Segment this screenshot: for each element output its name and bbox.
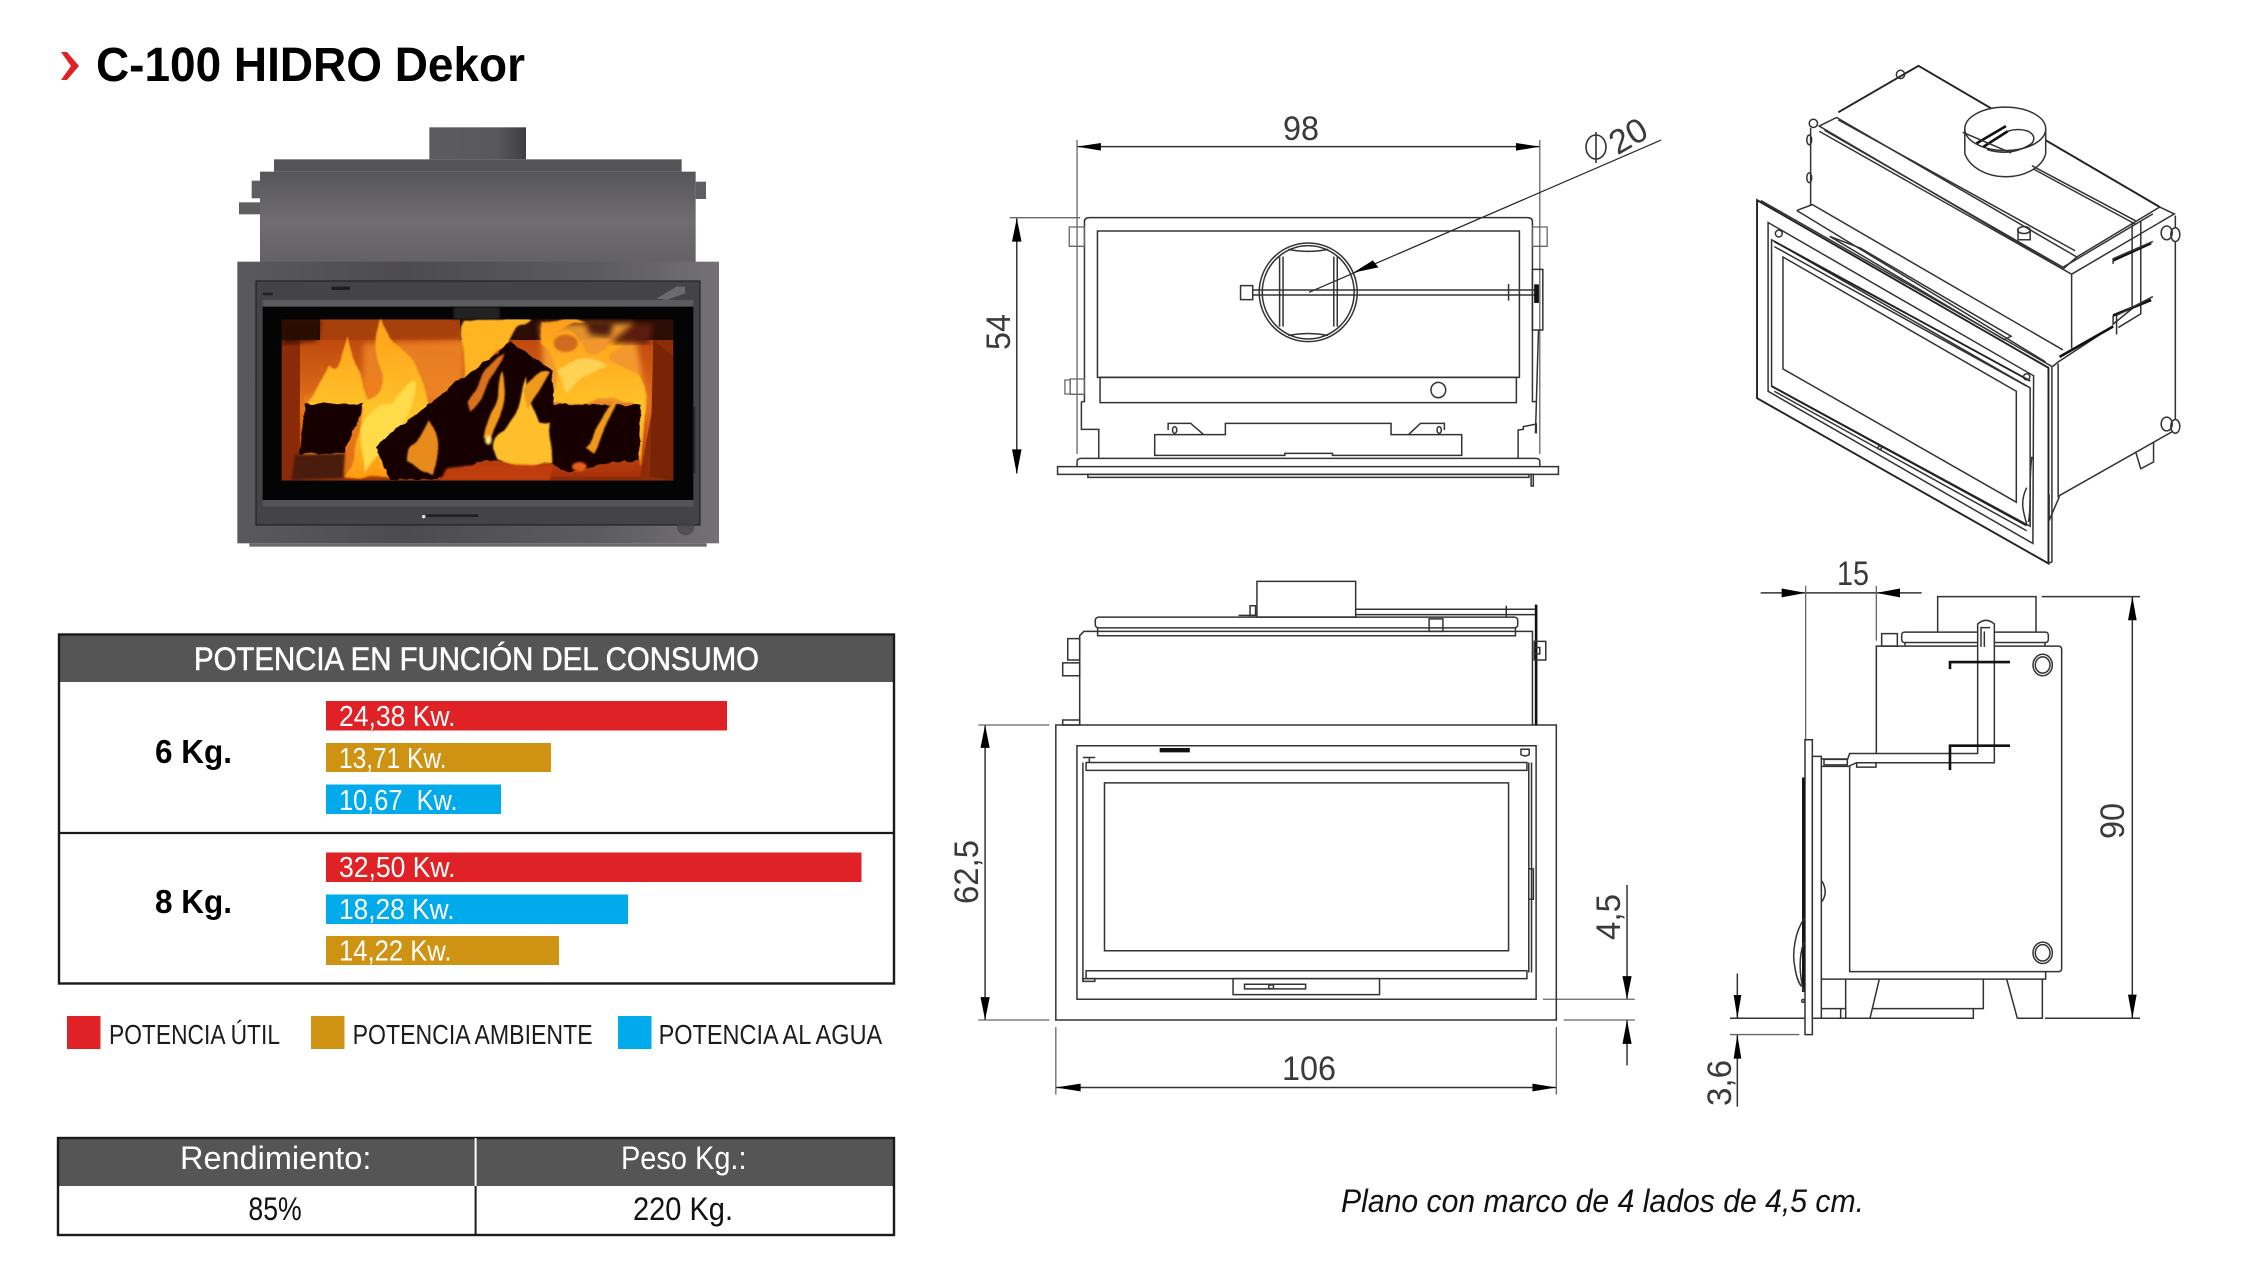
dimension label: 90: 90	[2094, 803, 2132, 839]
outer frame	[237, 262, 719, 543]
lower structure and door	[1058, 402, 1558, 486]
upper body	[1063, 581, 1546, 725]
legend swatch: ambient power	[311, 1016, 344, 1049]
header: efficiency: Rendimiento:	[180, 1140, 371, 1176]
door and flange	[1794, 740, 1825, 1035]
diameter symbol and label: 20	[1603, 111, 1654, 162]
water pipes	[239, 181, 706, 214]
row label: 8 Kg: 8 Kg.	[155, 883, 232, 920]
dimension 62,5	[978, 725, 1049, 1020]
bar label: 18,28 Kw.	[339, 894, 454, 926]
caption: Plano con marco de 4 lados de 4,5 cm.	[1341, 1183, 1864, 1219]
table header	[58, 1138, 894, 1186]
dimension label: 3,6: 3,6	[1701, 1060, 1739, 1106]
legend label: POTENCIA AMBIENTE	[353, 1019, 593, 1050]
legend swatch: useful power	[67, 1016, 100, 1049]
dimension label: 106: 106	[1282, 1050, 1336, 1088]
chart frame	[59, 634, 894, 984]
bar label: 10,67 Kw.	[339, 785, 458, 817]
bar label: 24,38 Kw.	[339, 701, 456, 733]
top cap	[274, 159, 682, 172]
technical drawing: front view	[978, 581, 1635, 1095]
dimension label: 62,5: 62,5	[948, 840, 986, 904]
legend swatch: water power	[618, 1016, 652, 1049]
upper body	[260, 172, 696, 263]
technical drawing: top view	[1010, 140, 1661, 486]
damper highlight	[453, 307, 500, 319]
black glass border	[263, 307, 693, 500]
bar: 14,22 Kw	[326, 936, 559, 965]
technical drawing: isometric view	[1757, 66, 2180, 563]
bar label: 32,50 Kw.	[339, 852, 456, 884]
legend label: POTENCIA ÚTIL	[109, 1019, 280, 1050]
damper rod	[2032, 166, 2136, 224]
bar label: 13,71 Kw.	[339, 743, 446, 775]
bar: 24,38 Kw	[326, 701, 727, 730]
value: efficiency: 85%	[248, 1191, 302, 1227]
technical drawing: side view	[1730, 586, 2140, 1107]
dimension label: 98: 98	[1283, 110, 1319, 148]
bar: 18,28 Kw	[326, 894, 628, 924]
value: weight: 220 Kg.	[633, 1191, 733, 1227]
flue collar	[1963, 107, 2046, 177]
dimension label: 54: 54	[980, 314, 1018, 350]
dimension label: 4,5: 4,5	[1590, 894, 1628, 940]
damper bracket	[1821, 620, 2010, 770]
chart heading text: POTENCIA EN FUNCIÓN DEL CONSUMO	[194, 641, 759, 677]
bar: 32,50 Kw	[326, 852, 862, 882]
bar label: 14,22 Kw.	[339, 936, 452, 968]
dimension 106	[1056, 1027, 1556, 1095]
title	[61, 39, 525, 92]
header: weight: Peso Kg.:	[621, 1140, 746, 1176]
door hardware	[263, 287, 695, 535]
body side	[1850, 597, 2062, 972]
inner door frame	[256, 281, 700, 525]
dimension 4,5	[1543, 885, 1635, 1065]
frame and glass	[1056, 725, 1556, 1020]
front frame	[1757, 200, 2052, 563]
dimension 54	[1010, 218, 1080, 474]
dimension 90	[2042, 597, 2140, 1018]
title text: C-100 HIDRO Dekor	[96, 39, 525, 92]
upper block	[1797, 66, 2174, 362]
flue collar	[429, 127, 526, 159]
panel: power by consumption chart	[59, 634, 894, 984]
side panel	[2049, 216, 2180, 520]
diameter leader	[1309, 140, 1661, 292]
dimension 15	[1761, 586, 1922, 740]
chart heading bar	[60, 635, 894, 682]
fire in glass	[282, 319, 673, 481]
product photo: fireplace	[237, 127, 719, 547]
flue and damper	[1241, 243, 1543, 433]
legend	[67, 1016, 882, 1050]
table: efficiency and weight	[58, 1138, 894, 1235]
bars: 8 Kg	[326, 852, 862, 968]
base and feet	[1821, 972, 2046, 1018]
bar: 13,71 Kw	[326, 743, 551, 772]
dimension label: 15: 15	[1837, 555, 1869, 593]
logs	[300, 342, 641, 480]
bars: 6 Kg	[326, 701, 727, 817]
body outline	[1081, 218, 1536, 402]
legend label: POTENCIA AL AGUA	[659, 1019, 882, 1050]
bar: 10,67 Kw	[326, 784, 501, 814]
row label: 6 Kg: 6 Kg.	[155, 733, 232, 770]
icon: red chevron	[61, 52, 79, 80]
table frame	[58, 1138, 894, 1235]
dimension 3,6	[1730, 974, 1872, 1107]
dimension 98	[1077, 140, 1540, 454]
